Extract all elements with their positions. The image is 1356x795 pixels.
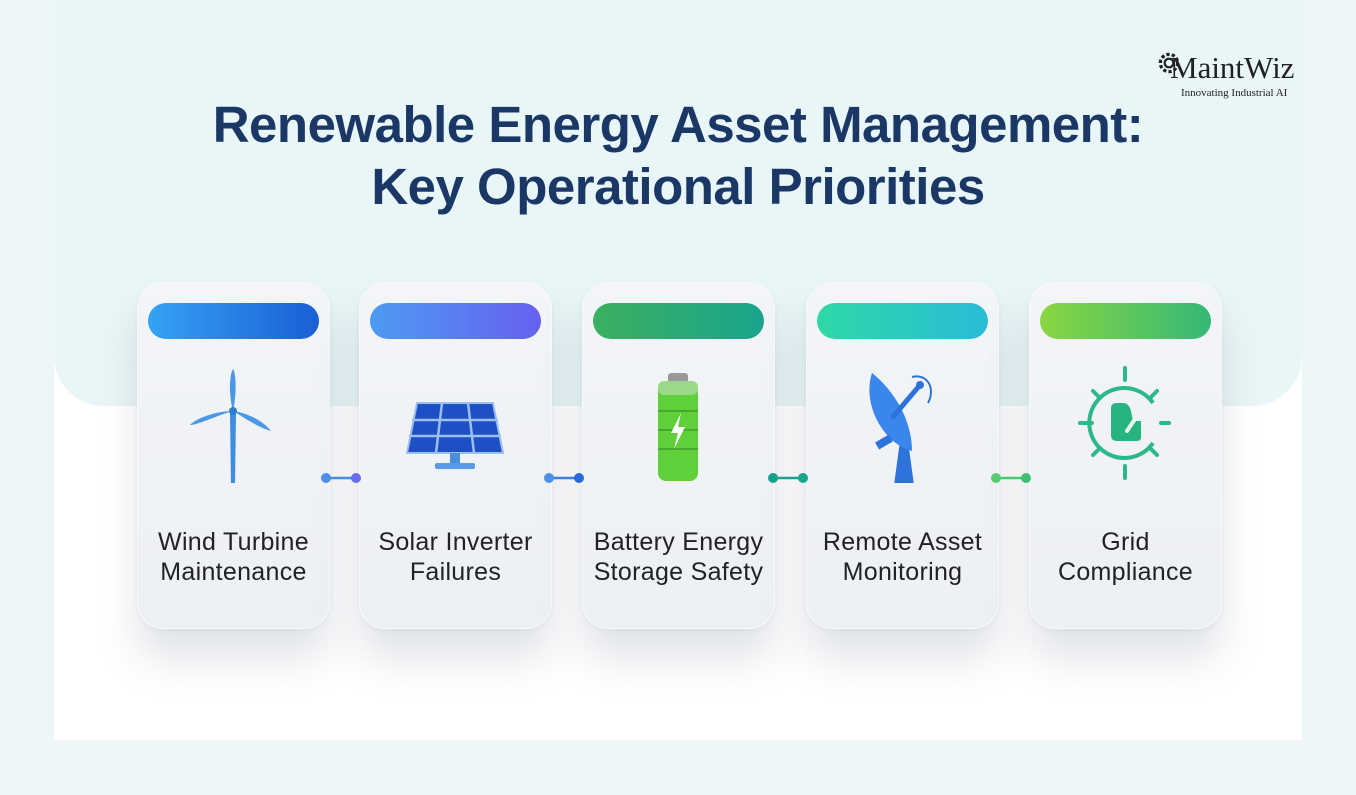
icon: wind turbine [190, 369, 271, 483]
card: solar: Failures [410, 558, 501, 586]
icon: gear [1158, 52, 1180, 74]
card: solar [359, 282, 552, 629]
icon: solar panel [406, 402, 504, 469]
card: battery [582, 282, 775, 629]
icon: grid gauge [1078, 366, 1171, 480]
top light panel [54, 0, 1302, 406]
card: satellite dish: Remote Asset [823, 528, 982, 556]
card: satellite dish: Monitoring [843, 558, 962, 586]
card: battery: Storage Safety [594, 558, 763, 586]
connector 2 [544, 473, 584, 483]
card: satellite dish [806, 282, 999, 629]
card: battery: Battery Energy [594, 528, 763, 556]
card: solar: Solar Inverter [378, 528, 533, 556]
logo: MaintWiz [1170, 50, 1294, 85]
card: grid compliance [1029, 282, 1222, 629]
icon: battery [658, 373, 698, 481]
logo: Innovating Industrial AI [1181, 87, 1287, 99]
card: wind turbine: Maintenance [160, 558, 307, 586]
connector 4 [991, 473, 1031, 483]
title: Renewable Energy Asset Management: [213, 96, 1143, 153]
card: grid compliance: Grid [1101, 528, 1150, 556]
logo [1158, 50, 1294, 99]
card: wind turbine: Wind Turbine [158, 528, 309, 556]
card: wind turbine [137, 282, 330, 629]
icon: satellite dish [869, 373, 932, 483]
white panel [54, 300, 1302, 740]
title: Key Operational Priorities [371, 158, 985, 215]
connector 3 [768, 473, 808, 483]
connector 1 [321, 473, 361, 483]
card: grid compliance: Compliance [1058, 558, 1193, 586]
title [213, 96, 1143, 215]
